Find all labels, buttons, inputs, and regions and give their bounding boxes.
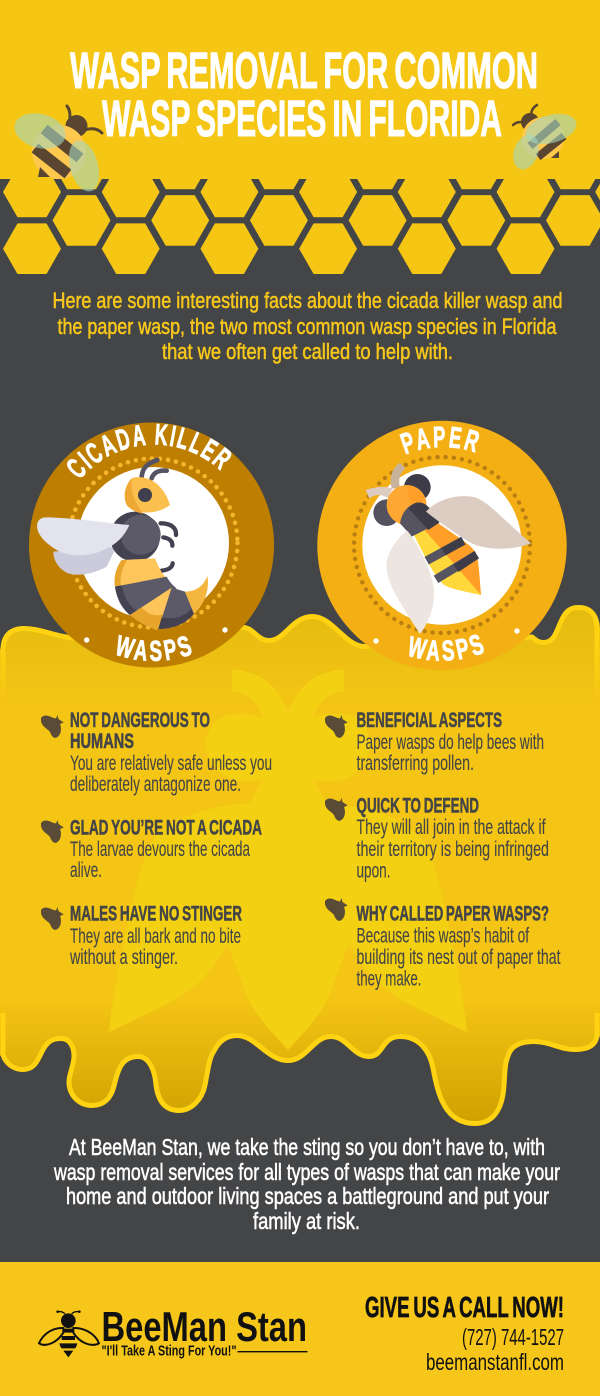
fact: quick to defend: upon. bbox=[356, 860, 390, 882]
fact: glad you're not a cicada: alive. bbox=[70, 859, 102, 882]
title bbox=[70, 42, 538, 147]
icon: cicada killer wasp bbox=[37, 460, 208, 629]
fact: not dangerous to humans: NOT DANGEROUS TO bbox=[70, 708, 210, 732]
facts: paper wasps bbox=[325, 708, 561, 990]
footer band bbox=[0, 1262, 600, 1396]
fact: why called paper wasps: they make. bbox=[356, 968, 422, 990]
fact: beneficial aspects: BENEFICIAL ASPECTS bbox=[356, 708, 502, 732]
fact: not dangerous to humans: deliberately antagonize one. bbox=[70, 773, 241, 796]
fact: quick to defend: QUICK TO DEFEND bbox=[356, 794, 479, 818]
fact: beneficial aspects bbox=[325, 708, 544, 775]
fact: glad you're not a cicada bbox=[41, 816, 262, 882]
closing text bbox=[53, 1134, 560, 1234]
fact: glad you're not a cicada: The larvae devours the cicada bbox=[70, 838, 250, 861]
watermark: bee silhouette bbox=[109, 670, 467, 1050]
fact: not dangerous to humans: HUMANS bbox=[70, 729, 134, 753]
fact: males have no stinger: MALES HAVE NO STINGER bbox=[70, 902, 242, 926]
label: paper: PAPER bbox=[399, 426, 480, 454]
fact: why called paper wasps bbox=[325, 898, 561, 990]
panel: paper wasp badge bbox=[317, 420, 567, 670]
fact: not dangerous to humans: You are relatively safe unless you bbox=[70, 752, 272, 775]
icon: left bee bbox=[10, 106, 104, 195]
header band bbox=[0, 0, 600, 179]
intro text bbox=[52, 288, 562, 364]
fact: glad you're not a cicada: GLAD YOU’RE NOT A CICADA bbox=[70, 816, 262, 840]
icon: logo bee bbox=[39, 1310, 99, 1357]
icon: right bee bbox=[509, 105, 580, 173]
icon: paper wasp bbox=[366, 463, 531, 634]
fact: beneficial aspects: transferring pollen. bbox=[356, 752, 474, 775]
honeycomb pattern bbox=[3, 139, 600, 274]
fact: not dangerous to humans bbox=[41, 708, 272, 796]
fact: quick to defend bbox=[325, 794, 549, 882]
fact: males have no stinger: They are all bark and no bite bbox=[70, 925, 241, 948]
fact: males have no stinger: without a stinger. bbox=[69, 946, 178, 969]
label: cicada killer: CICADA KILLER bbox=[67, 424, 232, 478]
facts: cicada killer wasps bbox=[41, 708, 272, 969]
label: wasps: WASPS bbox=[409, 634, 484, 662]
logo: BeeMan Stan: "I'll Take A Sting For You!" bbox=[102, 1344, 236, 1360]
panel: cicada killer badge bbox=[29, 422, 274, 668]
contact details bbox=[365, 1292, 564, 1375]
logo: BeeMan Stan: BeeMan Stan bbox=[102, 1303, 307, 1350]
logo: BeeMan Stan bbox=[39, 1303, 307, 1360]
label: wasps: WASPS bbox=[116, 634, 192, 662]
intro text: that we often get called to help with. bbox=[162, 339, 453, 364]
closing text: family at risk. bbox=[253, 1208, 360, 1234]
panel: honey drip bbox=[0, 607, 600, 1124]
fact: males have no stinger bbox=[41, 902, 242, 969]
